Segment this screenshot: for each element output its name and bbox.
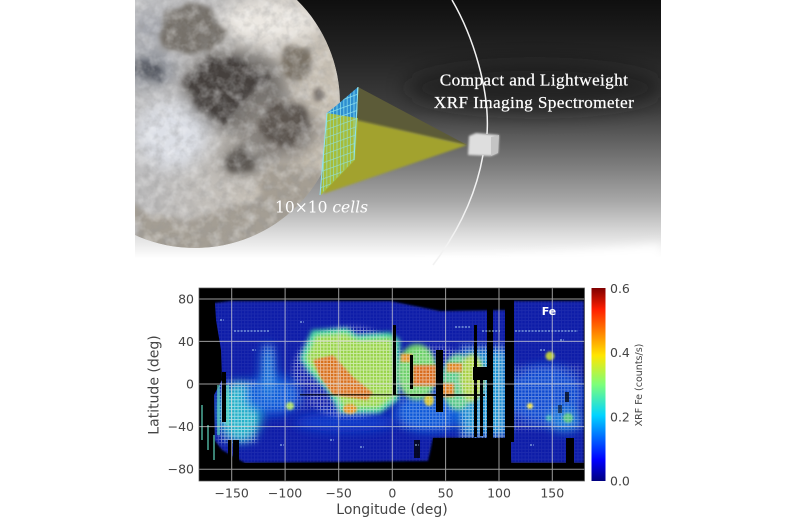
y axis title: Latitude (deg) — [146, 335, 162, 435]
y axis ticks and labels: 80 — [178, 292, 194, 306]
x axis tick labels: 150 — [540, 486, 564, 500]
western mare high: green-yellow — [306, 333, 396, 408]
y axis ticks and labels — [168, 292, 194, 476]
moon — [135, 0, 340, 248]
x axis tick labels: −150 — [215, 486, 249, 500]
colour bar tick labels: 0.4 — [610, 345, 630, 360]
y axis ticks and labels: −40 — [168, 419, 194, 434]
cyan stripes in western gap — [201, 385, 229, 460]
x axis tick labels: 50 — [438, 486, 454, 500]
heading — [434, 70, 634, 112]
colour bar tick labels: 0.6 — [610, 281, 630, 296]
x axis tick labels — [215, 486, 564, 500]
map data — [199, 300, 584, 463]
observation beam: lower — [323, 120, 467, 194]
colour bar tick labels — [610, 281, 630, 488]
y axis ticks and labels: 0 — [186, 376, 194, 392]
mid blue fields — [218, 344, 583, 442]
map background — [199, 288, 584, 481]
cell lattice overlay — [199, 301, 584, 463]
colour bar title: XRF Fe (counts/s) — [634, 344, 645, 426]
coverage base — [199, 301, 584, 463]
orbit arc — [433, 0, 487, 265]
panel: lunar orbit illustration — [135, 0, 661, 265]
isolated high spots — [286, 352, 573, 423]
x axis tick labels: −100 — [268, 486, 302, 500]
x axis title: Longitude (deg) — [336, 502, 448, 518]
x axis tick labels: −50 — [326, 486, 352, 500]
plot grid lines — [199, 288, 584, 481]
colour bar tick labels: 0.0 — [610, 474, 630, 488]
y axis ticks and labels: −80 — [168, 462, 194, 476]
observation beam: upper — [357, 87, 467, 145]
heading: Compact and Lightweight — [440, 70, 628, 90]
data gaps (black strips) — [199, 300, 584, 464]
western mare high: cyan-green — [300, 328, 400, 413]
y axis ticks and labels: 40 — [178, 334, 194, 349]
white fade at bottom of illustration — [626, 244, 658, 252]
label: 10x10 cells: 10×10 cells — [275, 198, 368, 216]
dark space background — [135, 0, 661, 272]
panel: Fe XRF heat map — [146, 288, 585, 518]
colour bar tick labels: 0.2 — [610, 410, 630, 424]
plot frame — [199, 288, 584, 481]
icon: spectrometer cube — [468, 133, 499, 156]
dark band behind heading — [405, 64, 665, 112]
footprint panel: 10x10 cell grid — [320, 87, 358, 195]
colour bar legend — [592, 281, 645, 488]
eastern mare highs — [397, 344, 484, 410]
heading: XRF Imaging Spectrometer — [434, 93, 634, 112]
sparse bright cells in northern band — [220, 320, 578, 447]
x axis tick labels: 0 — [388, 486, 396, 500]
element label: Fe: Fe — [542, 305, 556, 318]
western mare high: orange — [313, 355, 373, 400]
x axis tick labels: 100 — [487, 486, 511, 500]
